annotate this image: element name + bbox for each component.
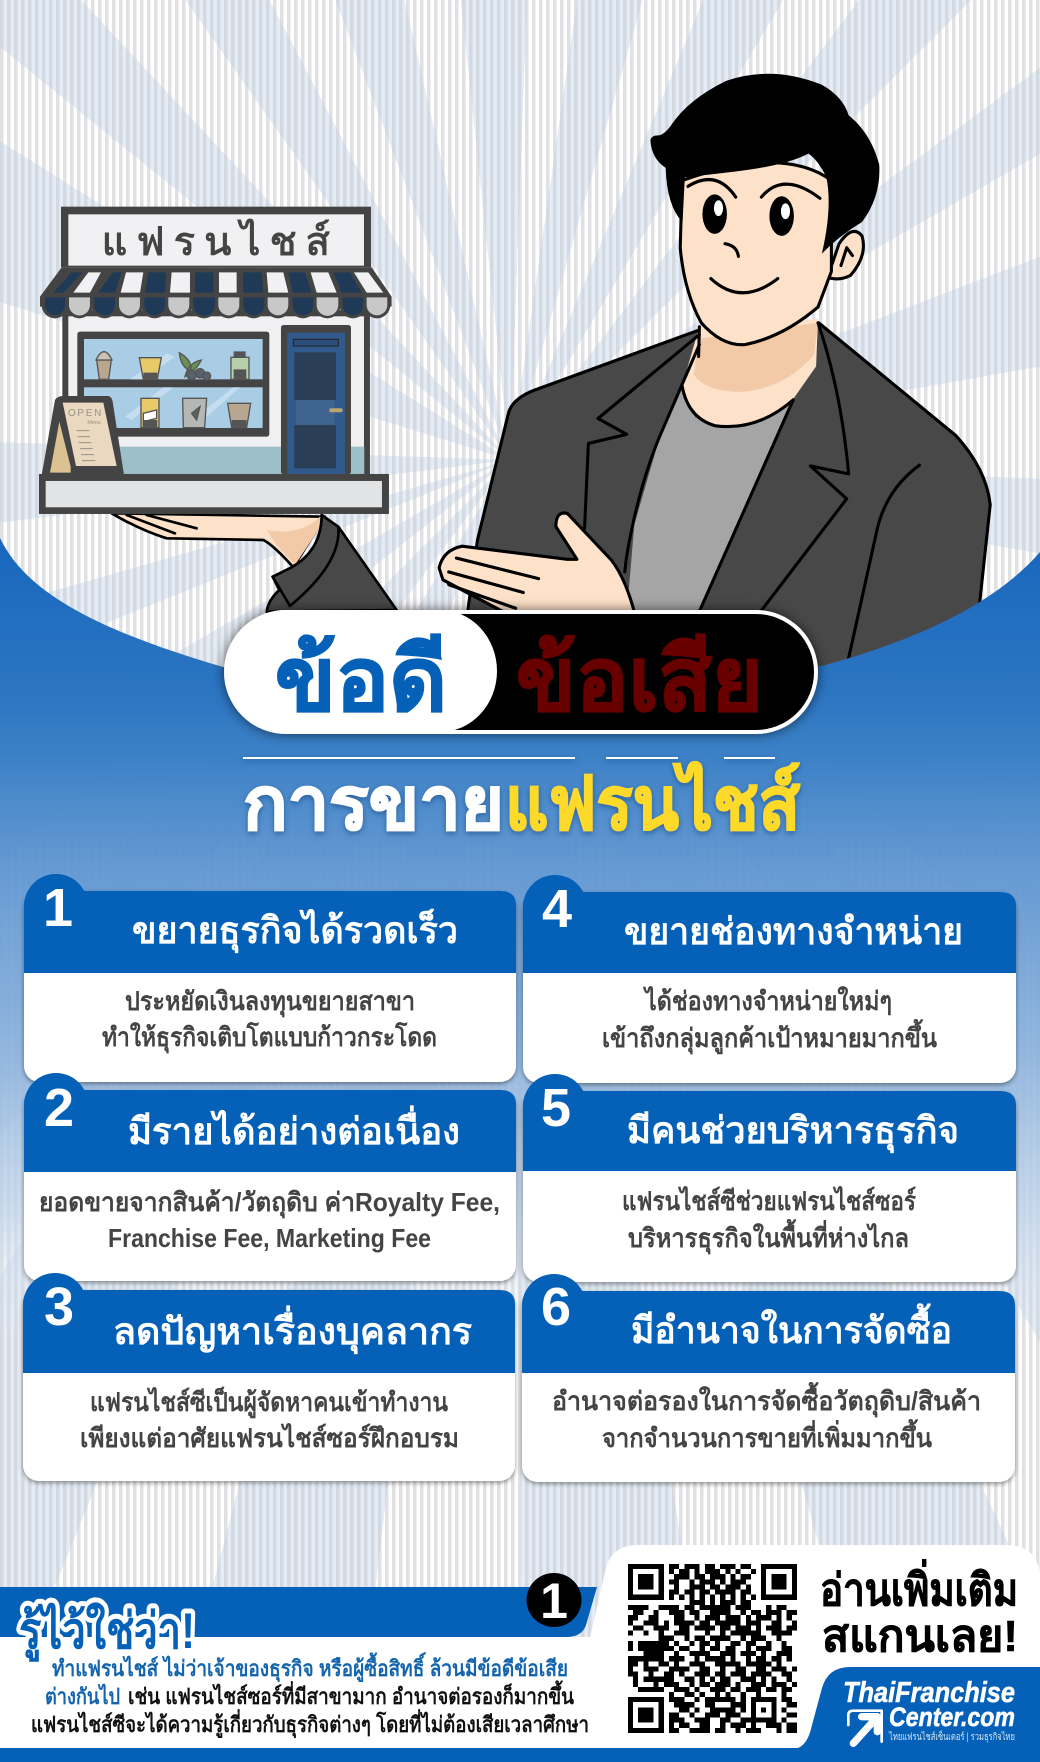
carrying arm and sleeve	[112, 513, 397, 612]
face	[680, 163, 831, 345]
logo name: ThaiFranchise	[843, 1677, 1015, 1709]
card 1: 1	[43, 878, 73, 938]
teal band	[69, 447, 364, 474]
cons label: ข้อเสีย	[516, 630, 763, 729]
logo arrow	[848, 1711, 882, 1743]
footer paragraph: เช่น แฟรนไชส์ซอร์ที่มีสาขามาก อำนาจต่อรองก็มากขึ้น	[128, 1680, 574, 1709]
card 5: แฟรนไชส์ซีช่วยแฟรนไชส์ซอร์	[622, 1185, 916, 1216]
eyes	[702, 194, 794, 236]
card 2: 2	[44, 1078, 74, 1138]
card 5	[523, 1074, 1016, 1282]
did-you-know heading: รู้ไว้ใช่ว่า!	[19, 1602, 195, 1662]
footer heading band	[0, 1587, 597, 1637]
card 4: เข้าถึงกลุ่มลูกค้าเป้าหมายมากขึ้น	[602, 1018, 937, 1055]
footer paragraph	[31, 1652, 589, 1739]
read more text: สแกนเลย!	[822, 1612, 1018, 1661]
logo panel	[798, 1667, 1040, 1748]
card 2: Franchise Fee, Marketing Fee	[108, 1223, 431, 1253]
card 4: ขยายช่องทางจำหน่าย	[624, 911, 963, 952]
did-you-know heading: รู้ไว้ใช่ว่า!	[19, 1602, 195, 1662]
jacket	[453, 323, 990, 722]
card 3	[23, 1273, 515, 1481]
card 3: เพียงแต่อาศัยแฟรนไชส์ซอร์ฝึกอบรม	[80, 1422, 459, 1453]
ear	[828, 231, 863, 279]
shop sign	[61, 207, 371, 267]
card 3: ลดปัญหาเรื่องบุคลากร	[113, 1305, 472, 1355]
card 1	[24, 874, 516, 1082]
neck shadow	[694, 323, 818, 392]
card 1: ทำให้ธุรกิจเติบโตแบบก้าวกระโดด	[102, 1021, 437, 1054]
neck	[682, 319, 818, 427]
open hand	[439, 513, 636, 619]
title top lines	[243, 757, 775, 759]
title: แฟรนไชส์	[505, 760, 801, 845]
finger lines	[127, 515, 197, 533]
pros label: ข้อดี	[275, 630, 447, 729]
logo panel: Center.com	[889, 1702, 1015, 1732]
palm under shop	[112, 513, 325, 567]
drinks and products	[96, 352, 251, 428]
blue background wave	[0, 538, 1040, 1340]
QR code	[628, 1564, 797, 1733]
card 1: ขยายธุรกิจได้รวดเร็ว	[132, 907, 458, 954]
footer white panel	[0, 1545, 1040, 1748]
card 2: มีรายได้อย่างต่อเนื่อง	[128, 1105, 460, 1152]
card 6: จากจำนวนการขายที่เพิ่มมากขึ้น	[602, 1418, 932, 1453]
jacket lapels	[585, 323, 919, 667]
shop base	[39, 474, 389, 514]
card 3: 3	[44, 1277, 74, 1337]
awning	[40, 267, 392, 318]
sleeve	[267, 515, 397, 612]
card 4: 4	[542, 879, 572, 939]
title text: การขาย	[243, 762, 504, 845]
hair	[650, 74, 879, 254]
eyebrows nose mouth	[688, 180, 852, 293]
panel: shop	[39, 207, 392, 514]
A-frame menu board: OPEN	[68, 408, 101, 419]
card 2: ยอดขายจากสินค้า/วัตถุดิบ ค่าRoyalty Fee,	[39, 1187, 500, 1219]
palm shadow	[267, 517, 325, 565]
card 6: อำนาจต่อรองในการจัดซื้อวัตถุดิบ/สินค้า	[552, 1381, 981, 1418]
card 2	[24, 1073, 516, 1281]
pros half	[225, 610, 497, 732]
number badge: 1	[540, 1573, 568, 1629]
grey shirt	[627, 386, 791, 615]
A-frame menu board	[42, 396, 124, 475]
card 5: 5	[541, 1078, 571, 1138]
fingers	[449, 558, 539, 608]
footer blue bar	[0, 1748, 1040, 1762]
footer paragraph: ต่างกันไป	[45, 1683, 120, 1709]
card 6: 6	[541, 1277, 571, 1337]
card 6: มีอำนาจในการจัดซื้อ	[631, 1303, 952, 1351]
footer paragraph: แฟรนไชส์ซีจะได้ความรู้เกี่ยวกับธุรกิจต่างๆ โดยที่ไม่ต้องเสียเวลาศึกษา	[31, 1708, 589, 1739]
illustration: businessman	[439, 74, 990, 722]
display window	[77, 332, 269, 437]
number badge	[526, 1573, 582, 1629]
shop sign: แฟรนไชส์	[102, 219, 330, 264]
card 4: ได้ช่องทางจำหน่ายใหม่ๆ	[642, 985, 892, 1016]
card 6	[522, 1274, 1015, 1482]
door	[281, 325, 351, 474]
card 3: แฟรนไชส์ซีเป็นผู้จัดหาคนเข้าทำงาน	[90, 1386, 448, 1419]
title	[243, 757, 801, 845]
shop wall	[65, 313, 367, 477]
card 1: ประหยัดเงินลงทุนขยายสาขา	[125, 986, 415, 1018]
A-frame menu board: Menu	[87, 420, 101, 426]
card 4	[523, 875, 1016, 1083]
card 5: บริหารธุรกิจในพื้นที่ห่างไกล	[628, 1218, 909, 1255]
cuff line	[273, 527, 339, 606]
heading pill: pros and cons	[225, 610, 816, 732]
footer paragraph: ทำแฟรนไชส์ ไม่ว่าเจ้าของธุรกิจ หรือผู้ซื้อสิทธิ์ ล้วนมีข้อดีข้อเสีย	[52, 1652, 568, 1683]
card 5: มีคนช่วยบริหารธุรกิจ	[627, 1110, 959, 1154]
read more text	[820, 1559, 1018, 1661]
